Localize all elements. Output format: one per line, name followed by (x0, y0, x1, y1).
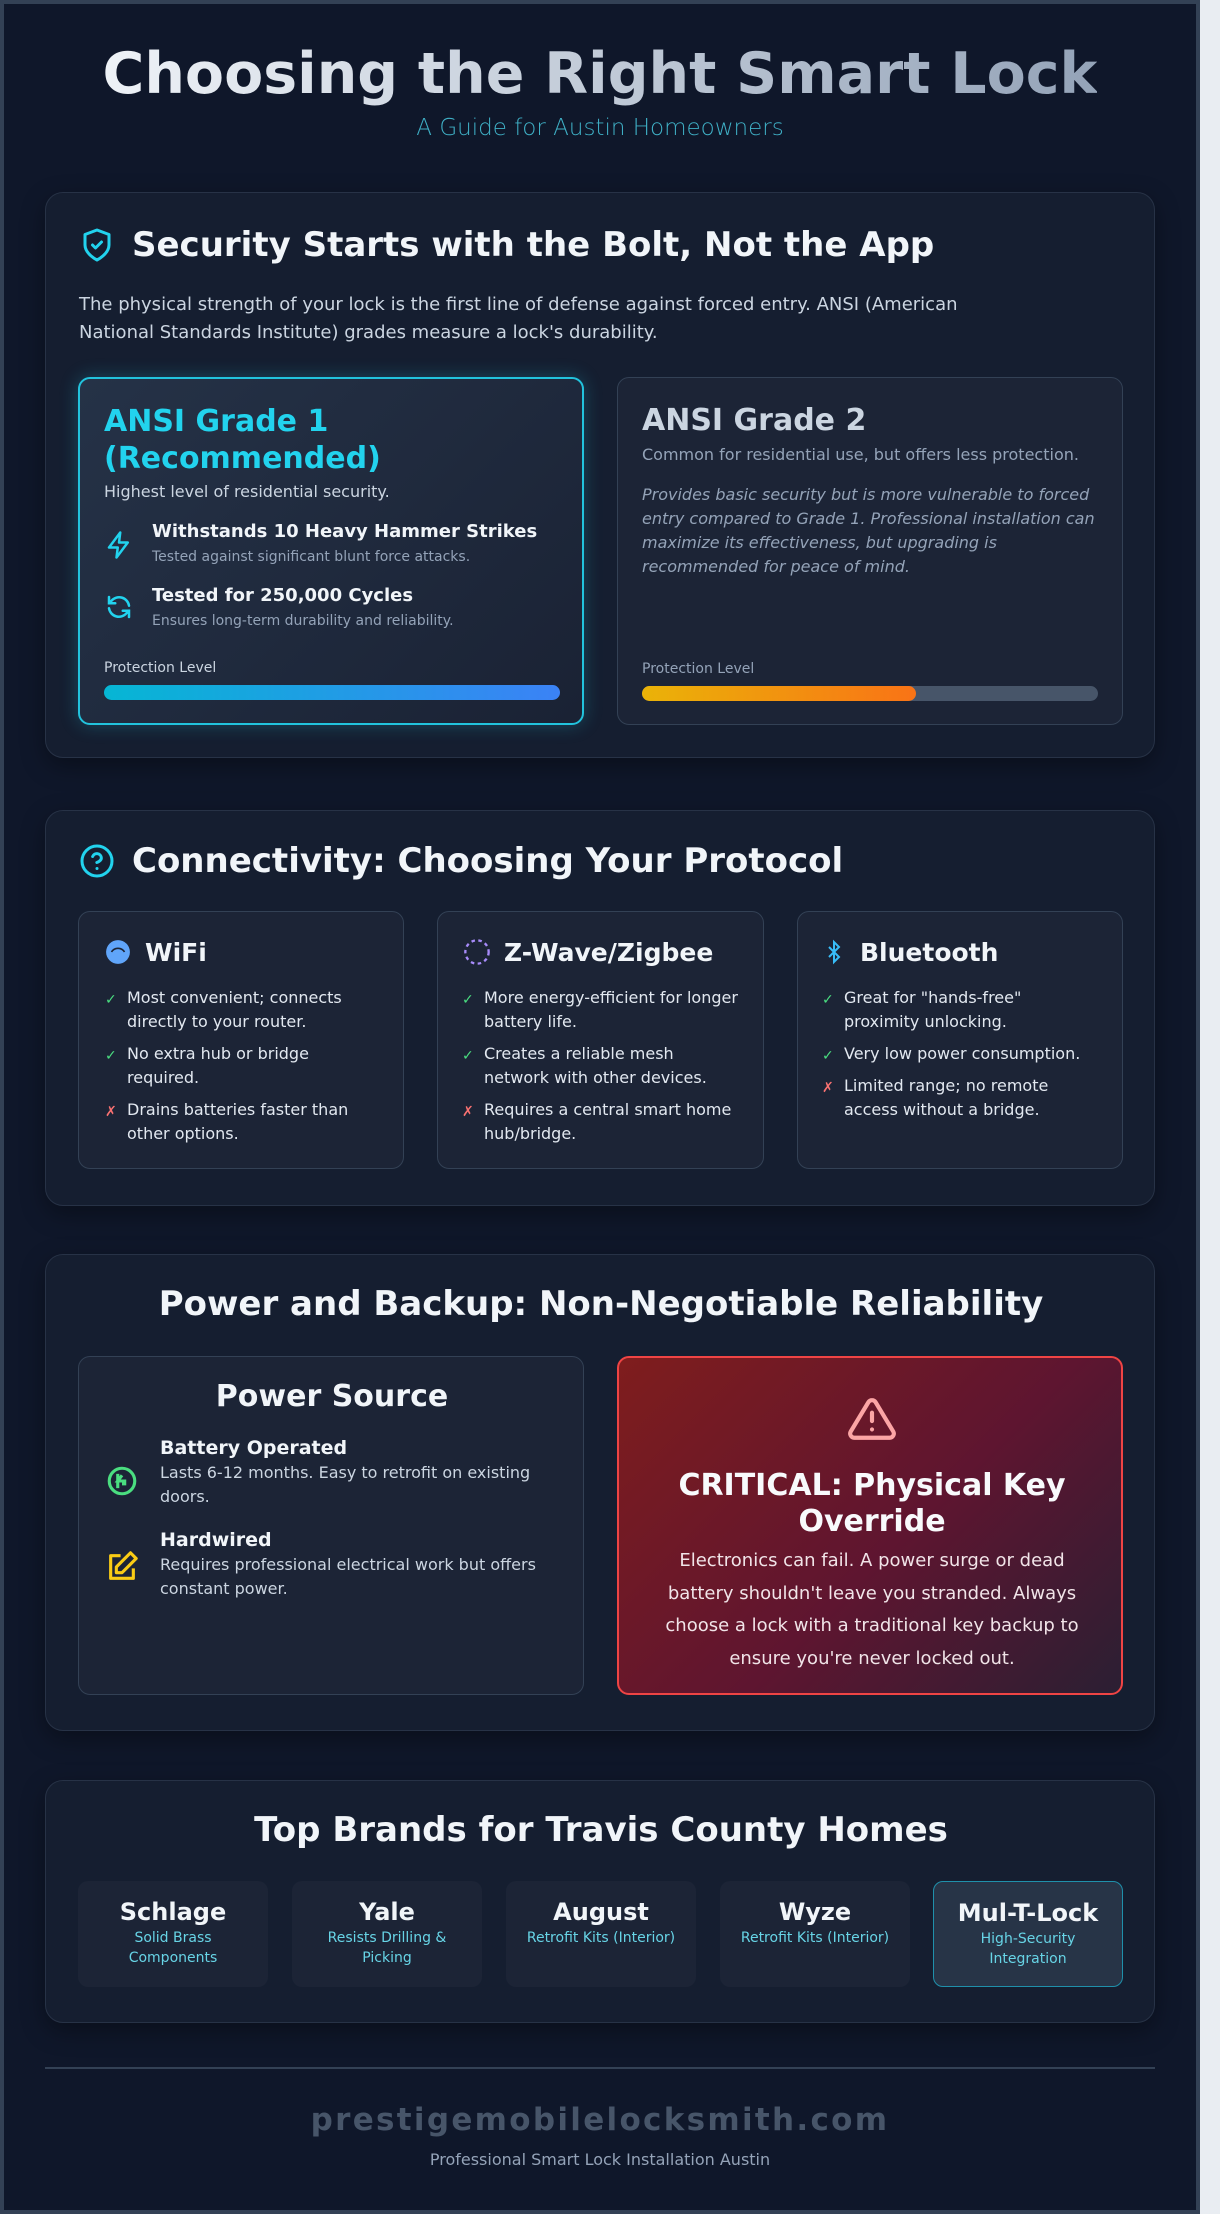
callout: critical key override: CRITICAL: Physical Key Override (678, 1468, 1066, 1539)
brand: wyze (720, 1881, 910, 1987)
card: bluetooth: Limited range; no remote access without a bridge. (844, 1076, 1048, 1119)
card: zwave (437, 911, 764, 1169)
brand: yale: Resists Drilling & Picking (328, 1930, 446, 1966)
card: grade 2: Provides basic security but is more vulnerable to forced entry compared to Grade 1. Professional installation can maximize its effectiveness, but upgrading is recommended for peace of mind. (642, 485, 1095, 576)
heading: brands: Top Brands for Travis County Homes (254, 1810, 948, 1850)
subtitle: A Guide for Austin Homeowners (416, 115, 784, 141)
protection bar grade 1: Protection Level (104, 660, 216, 676)
panel: connectivity (45, 810, 1155, 1206)
card: grade 1: ANSI Grade 1 (104, 404, 328, 439)
item: battery: Lasts 6-12 months. Easy to retrofit on existing doors. (160, 1463, 530, 1506)
card: zwave: Creates a reliable mesh network with other devices. (484, 1044, 707, 1087)
card: zwave: ✓ (462, 992, 474, 1008)
brand: wyze: Retrofit Kits (Interior) (741, 1930, 889, 1946)
feature: hammer: Withstands 10 Heavy Hammer Strikes (152, 521, 537, 542)
card: grade 2 (617, 377, 1123, 725)
brand: mul-t-lock (933, 1881, 1123, 1987)
feature: cycles (108, 585, 454, 629)
protection bar grade 1 (104, 660, 560, 700)
card: power source (78, 1356, 584, 1695)
card: zwave: Requires a central smart home hub/bridge. (484, 1100, 731, 1143)
card: wifi: Most convenient; connects directly to your router. (127, 988, 342, 1031)
card: wifi: ✓ (105, 992, 117, 1008)
icon: shield (84, 228, 110, 262)
brand: august: August (553, 1898, 649, 1926)
panel: security (45, 192, 1155, 758)
item: hardwired (109, 1529, 536, 1598)
card: wifi: ✓ (105, 1048, 117, 1064)
card: bluetooth: ✗ (822, 1080, 834, 1096)
card: bluetooth: Bluetooth (860, 938, 998, 966)
feature: cycles: Tested for 250,000 Cycles (152, 585, 413, 606)
card: wifi: No extra hub or bridge required. (127, 1044, 309, 1087)
feature: hammer: Tested against significant blunt force attacks. (152, 549, 470, 565)
brand: yale: Yale (359, 1898, 415, 1926)
brand: yale (292, 1881, 482, 1987)
icon: warning (848, 1398, 896, 1440)
brand: mul-t-lock: Mul-T-Lock (958, 1899, 1098, 1927)
protection bar grade 2: Protection Level (642, 661, 754, 677)
item: hardwired: Requires professional electrical work but offers constant power. (160, 1555, 536, 1598)
brand: wyze: Wyze (779, 1898, 851, 1926)
card: wifi: ✗ (105, 1104, 117, 1120)
footer tagline: Professional Smart Lock Installation Austin (430, 2150, 770, 2169)
brand: schlage: Schlage (120, 1898, 226, 1926)
brand: schlage: Solid Brass Components (129, 1930, 217, 1966)
feature: hammer (108, 521, 537, 565)
card: zwave: More energy-efficient for longer battery life. (484, 988, 738, 1031)
card: grade 1: (Recommended) (104, 441, 381, 476)
heading: security: Security Starts with the Bolt, Not the App (132, 225, 934, 265)
card: wifi (78, 911, 404, 1169)
heading: connectivity: Connectivity: Choosing Your Protocol (132, 841, 843, 881)
brand: august: Retrofit Kits (Interior) (527, 1930, 675, 1946)
card: grade 2: ANSI Grade 2 (642, 403, 866, 438)
intro text: The physical strength of your lock is the first line of defense against forced entry. ANSI (American National Standards Institute) grades measure a lock's durability. (79, 294, 958, 343)
feature: cycles: Ensures long-term durability and reliability. (152, 613, 454, 629)
protection bar grade 2 (642, 661, 1098, 701)
panel: brands (45, 1780, 1155, 2023)
panel: power (45, 1254, 1155, 1731)
card: power source: Power Source (216, 1379, 448, 1414)
card: zwave: ✓ (462, 1048, 474, 1064)
brand: august (506, 1881, 696, 1987)
item: hardwired: Hardwired (160, 1529, 272, 1551)
card: wifi: WiFi (145, 938, 207, 966)
heading: power: Power and Backup: Non-Negotiable Reliability (159, 1284, 1043, 1324)
card: bluetooth: Very low power consumption. (844, 1044, 1080, 1063)
brand: mul-t-lock: High-Security Integration (981, 1931, 1075, 1967)
callout: critical key override: Electronics can fail. A power surge or dead battery shouldn't leave you stranded. Always choose a lock with a traditional key backup to ensure you're never locked out. (665, 1550, 1079, 1668)
callout: critical key override (617, 1356, 1123, 1695)
card: zwave: Z-Wave/Zigbee (504, 938, 713, 966)
card: bluetooth: ✓ (822, 992, 834, 1008)
item: battery: Battery Operated (160, 1437, 347, 1459)
brand: schlage (78, 1881, 268, 1987)
card: bluetooth (797, 911, 1123, 1169)
card: wifi: Drains batteries faster than other options. (127, 1100, 348, 1143)
card: bluetooth: ✓ (822, 1048, 834, 1064)
card: grade 1: Highest level of residential security. (104, 482, 390, 501)
icon: question (80, 844, 114, 878)
title: Choosing the Right Smart Lock (103, 41, 1097, 107)
card: grade 2: Common for residential use, but offers less protection. (642, 445, 1079, 464)
footer domain: prestigemobilelocksmith.com (311, 2102, 889, 2138)
card: bluetooth: Great for "hands-free" proximity unlocking. (844, 988, 1021, 1031)
card: grade 1 (78, 377, 584, 725)
card: zwave: ✗ (462, 1104, 474, 1120)
item: battery (108, 1437, 530, 1506)
